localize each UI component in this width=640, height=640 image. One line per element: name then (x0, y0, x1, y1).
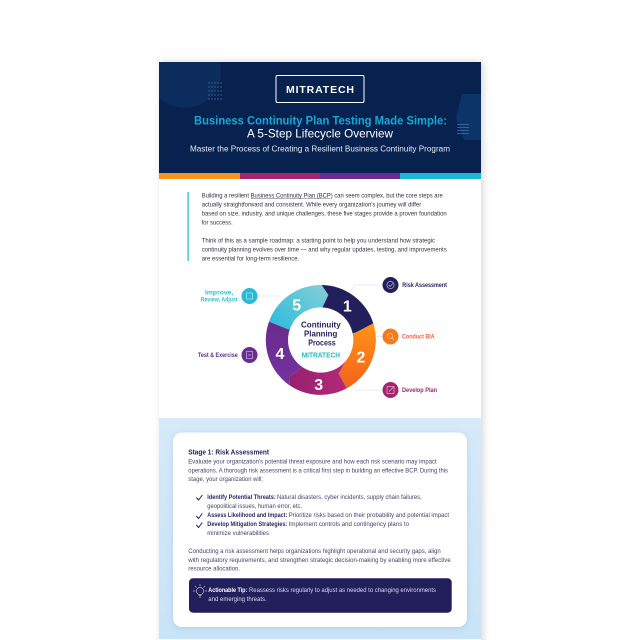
callout: actionable tip: Reassess risks regularly to adjust as needed to changing environments (249, 587, 436, 594)
text: centre title: Planning (304, 329, 337, 339)
text: centre title (301, 320, 341, 348)
text: stage summary (187, 548, 451, 573)
panel: stage 1 card (173, 432, 467, 627)
list: stage actions: Prioritize risks based on their probability and potential impact (289, 512, 449, 519)
text: stage description (188, 458, 449, 483)
text: stage summary: with regulatory requirements, and strengthen strategic decision-making by enabling more effective (187, 557, 451, 564)
step: risk assessment (382, 277, 448, 293)
step: improve, review, adjust (201, 288, 258, 304)
segment 2 (321, 323, 376, 388)
segment numbers: 5 (292, 298, 301, 315)
segment numbers: 3 (314, 377, 323, 394)
step: develop plan (382, 382, 437, 398)
segment 5 (269, 285, 328, 340)
segment numbers: 2 (357, 349, 366, 366)
panel: stage 1 background (159, 418, 481, 639)
callout: actionable tip: and emerging threats. (208, 596, 267, 603)
segment numbers (276, 298, 366, 394)
panel: infographic page (159, 62, 481, 640)
dots: header decoration right (457, 124, 469, 134)
list: stage actions: minimize vulnerabilities (207, 530, 270, 537)
step: test and exercise (198, 347, 258, 363)
colour stripe (159, 173, 481, 179)
text block: introduction: for success. (202, 220, 233, 226)
text: stage description: Evaluate your organization's potential threat exposure and how each risk scenario may impact (188, 458, 437, 466)
segment numbers: 1 (343, 299, 352, 316)
step: test and exercise: Test & Exercise (198, 352, 238, 359)
logo: centre Mitratech: MITRATECH (302, 352, 340, 359)
callout: actionable tip: Actionable Tip: (208, 587, 247, 594)
text: centre title: Process (308, 338, 336, 348)
text: stage summary: resource allocation. (188, 566, 240, 573)
text: tagline: Master the Process of Creating a Resilient Business Continuity Program (190, 144, 450, 154)
logo: Mitratech (276, 76, 364, 102)
logo: Mitratech: MITRATECH (286, 84, 354, 96)
text: stage description: operations. A thorough risk assessment is a critical first step in building an effective BCP. During this (188, 468, 449, 474)
panel: header banner (159, 62, 481, 173)
text block: introduction (188, 192, 447, 262)
step: improve, review, adjust: Review, Adjust (201, 296, 238, 303)
text block: introduction: Think of this as a sample roadmap: a starting point to help you understand how strategic (202, 238, 436, 244)
list: stage actions: Implement controls and contingency plans to (289, 521, 409, 528)
list: stage actions: Natural disasters, cyber incidents, supply chain failures, (277, 494, 422, 501)
segment 1 (321, 285, 373, 340)
heading: main title: Business Continuity Plan Testing Made Simple: (194, 114, 447, 128)
segment 4 (266, 322, 321, 386)
leader lines (257, 285, 383, 390)
text: stage description: stage, your organization will: (188, 476, 263, 483)
step: conduct BIA: Conduct BIA (402, 334, 435, 340)
dots: header decoration left (208, 82, 222, 100)
heading: subtitle: A 5-Step Lifecycle Overview (247, 126, 393, 140)
text block: introduction: Building a resilient Business Continuity Plan (BCP) can seem complex, but the core steps are (202, 192, 443, 200)
list: stage actions: Develop Mitigation Strategies: (207, 521, 287, 528)
list: stage actions (196, 494, 449, 537)
text block: introduction: are essential for long-term resilience. (202, 255, 299, 262)
icon: light bulb (193, 584, 207, 597)
text: stage summary: Conducting a risk assessment helps organizations highlight operational and security gaps, align (188, 548, 441, 555)
chart: continuity planning cycle (198, 277, 448, 398)
segment numbers: 4 (276, 346, 285, 363)
icon: check marks (196, 495, 202, 528)
callout: actionable tip (189, 578, 452, 613)
step: risk assessment: Risk Assessment (402, 282, 448, 289)
step: develop plan: Develop Plan (402, 387, 437, 394)
donut ring (266, 285, 376, 395)
step: improve, review, adjust: Improve, (205, 289, 233, 296)
segment 3 (289, 340, 347, 395)
text block: introduction: based on size, industry, and unique challenges, these five stages provide a proven foundation (202, 210, 447, 218)
step: conduct BIA (382, 328, 435, 344)
list: stage actions: Assess Likelihood and Impact: (207, 512, 287, 519)
text block: introduction: actually straightforward and consistent. While every organization's journey will differ (202, 202, 422, 208)
text: centre title: Continuity (301, 320, 341, 330)
heading: stage 1: Stage 1: Risk Assessment (188, 448, 269, 457)
list: stage actions: Identify Potential Threats: (207, 494, 276, 501)
list: stage actions: geopolitical issues, human error, etc. (207, 503, 302, 510)
text block: introduction: continuity planning evolves over time — and why regular updates, testing, and improvements (202, 246, 447, 254)
